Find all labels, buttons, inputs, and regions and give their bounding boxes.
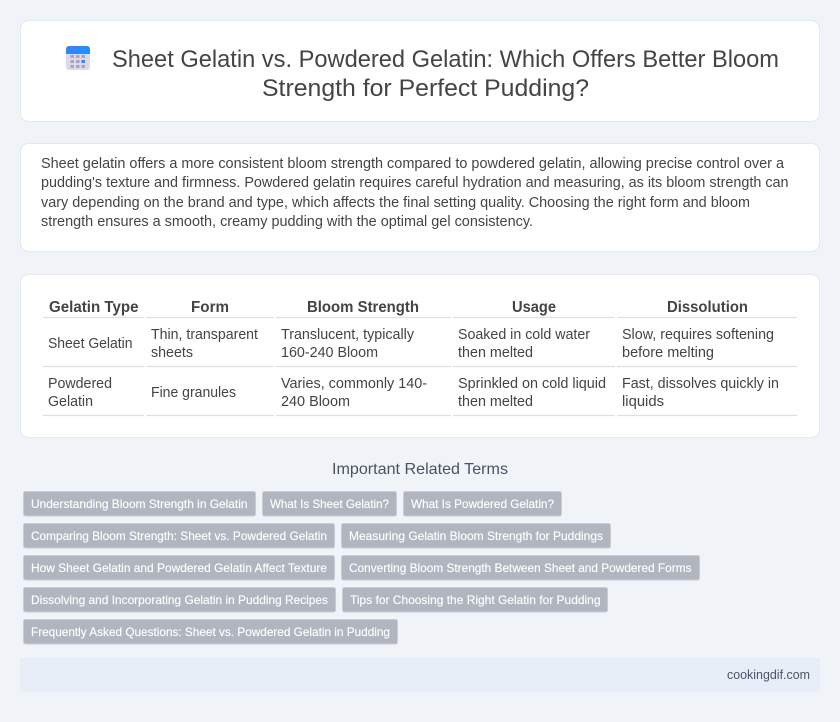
- table header row: Gelatin Type: [49, 299, 139, 316]
- footer source text: cookingdif.com: [727, 667, 810, 682]
- table row: powdered gelatin: liquids: [622, 394, 664, 410]
- table row: powdered gelatin: Varies, commonly 140-: [281, 376, 427, 392]
- icon: calendar: [66, 46, 90, 70]
- table row: powdered gelatin: Sprinkled on cold liquid: [458, 376, 606, 392]
- table row: sheet gelatin: Slow, requires softening: [622, 327, 774, 343]
- text block: summary: strength ensures a smooth, creamy pudding with the optimal gel consistency.: [41, 214, 533, 230]
- panel: summary paragraph: [20, 144, 820, 252]
- panel: comparison table: [20, 274, 820, 438]
- related terms tags: Understanding Bloom Strength in Gelatin: [31, 497, 248, 511]
- table row: sheet gelatin: Sheet Gelatin: [48, 336, 132, 352]
- table row: powdered gelatin: Powdered: [48, 376, 112, 392]
- table row: sheet gelatin: then melted: [458, 345, 533, 361]
- table row: sheet gelatin: sheets: [151, 345, 193, 361]
- header panel: [20, 20, 820, 122]
- text block: summary: vary depending on the brand and type, which affects the final setting quality. Choosing the right form and bloom: [41, 195, 750, 211]
- table header row: Usage: [512, 299, 556, 316]
- related terms tags: Converting Bloom Strength Between Sheet and Powdered Forms: [349, 561, 692, 575]
- table row: powdered gelatin: Fine granules: [151, 385, 236, 401]
- related terms tags: Frequently Asked Questions: Sheet vs. Powdered Gelatin in Pudding: [31, 625, 390, 639]
- text block: summary: Sheet gelatin offers a more consistent bloom strength compared to powdered gelatin, allowing precise control over a: [41, 156, 784, 172]
- table row: sheet gelatin: before melting: [622, 345, 714, 361]
- table row: powdered gelatin: Fast, dissolves quickly in: [622, 376, 779, 392]
- related terms tags: Comparing Bloom Strength: Sheet vs. Powdered Gelatin: [31, 529, 327, 543]
- heading: important related terms: Important Related Terms: [332, 461, 508, 478]
- related terms tags: Tips for Choosing the Right Gelatin for Pudding: [350, 593, 600, 607]
- table row: sheet gelatin: Thin, transparent: [151, 327, 258, 343]
- table row: powdered gelatin: 240 Bloom: [281, 394, 350, 410]
- table row: sheet gelatin: [43, 327, 797, 366]
- related terms tags: Dissolving and Incorporating Gelatin in Pudding Recipes: [31, 593, 328, 607]
- table header row: Form: [191, 299, 229, 316]
- text block: summary: pudding's texture and firmness. Powdered gelatin requires careful hydration and measuring, as its bloom strength can: [41, 175, 788, 191]
- related terms tags: Measuring Gelatin Bloom Strength for Puddings: [349, 529, 603, 543]
- footer bar: [20, 658, 820, 692]
- title: [112, 46, 779, 102]
- related terms tags: How Sheet Gelatin and Powdered Gelatin Affect Texture: [31, 561, 327, 575]
- table row: powdered gelatin: [43, 376, 797, 416]
- table header row: [43, 299, 797, 318]
- related terms tags: What Is Sheet Gelatin?: [270, 497, 389, 511]
- title: Strength for Perfect Pudding?: [262, 75, 589, 102]
- table header row: Dissolution: [667, 299, 748, 316]
- related terms tags: [24, 492, 700, 644]
- table row: powdered gelatin: then melted: [458, 394, 533, 410]
- text block: summary: [41, 156, 788, 230]
- table header row: Bloom Strength: [307, 299, 419, 316]
- table row: sheet gelatin: Soaked in cold water: [458, 327, 590, 343]
- table row: sheet gelatin: Translucent, typically: [281, 327, 415, 343]
- table row: sheet gelatin: 160-240 Bloom: [281, 345, 378, 361]
- table row: powdered gelatin: Gelatin: [48, 394, 93, 410]
- related terms tags: What Is Powdered Gelatin?: [411, 497, 554, 511]
- title: Sheet Gelatin vs. Powdered Gelatin: Which Offers Better Bloom: [112, 46, 779, 73]
